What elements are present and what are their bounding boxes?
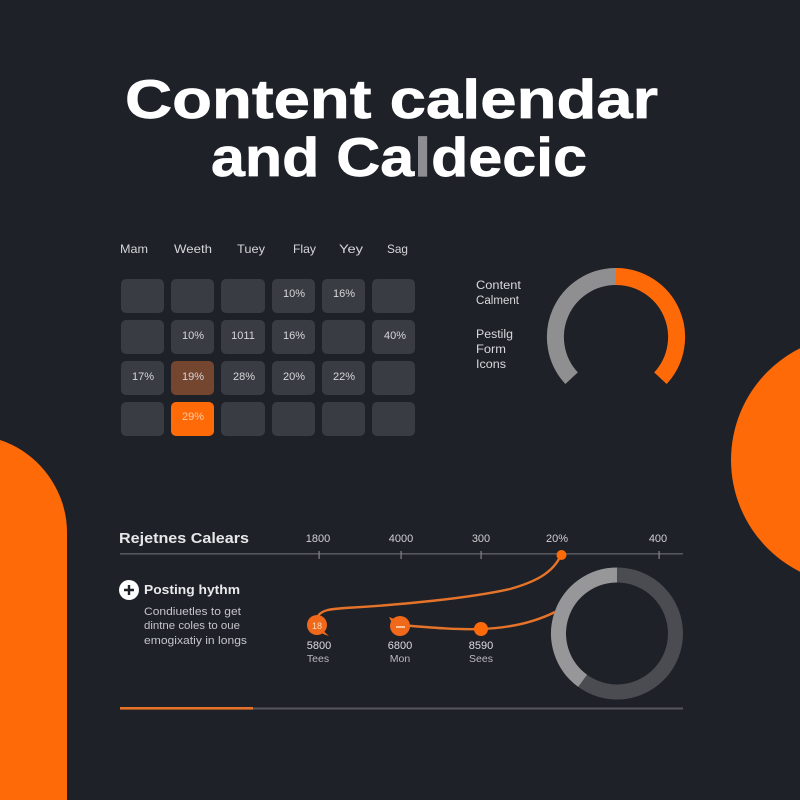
gauge side labels: Calment: [476, 295, 520, 307]
cell percentages: [132, 288, 406, 423]
title: [125, 68, 658, 188]
cell percentages: 22%: [333, 371, 355, 383]
milestone: mon: Mon: [390, 653, 410, 665]
cell percentages: 1011: [231, 330, 255, 342]
cell percentages: 20%: [283, 371, 305, 383]
connector lines: [318, 555, 561, 629]
gauge side labels: Content: [476, 280, 522, 292]
gauge side labels: Form: [476, 344, 506, 356]
cell percentages: 16%: [333, 288, 355, 300]
cell percentages: 40%: [384, 330, 406, 342]
milestone: tees: [307, 615, 331, 665]
milestone: mon: [388, 616, 412, 665]
decorative orange shape: left: [0, 440, 67, 800]
description: dintne coles to oue: [144, 620, 240, 632]
top marker: [556, 550, 566, 560]
weekday labels: Mam: [120, 242, 148, 256]
weekday labels: [120, 242, 408, 256]
timeline axis: [120, 533, 683, 559]
cell percentages: 16%: [283, 330, 305, 342]
milestone: sees: [469, 622, 493, 665]
cell percentages: 17%: [132, 371, 154, 383]
weekday labels: Weeth: [174, 242, 212, 256]
milestone: tees: 18: [312, 621, 322, 631]
donut chart: [558, 575, 676, 692]
axis labels: 300: [472, 533, 490, 545]
title: and Ca ldecic: [211, 126, 587, 188]
weekday labels: Flay: [293, 242, 316, 256]
description: emogixatiy in longs: [144, 635, 248, 647]
description: Condiuetles to get: [144, 606, 241, 618]
cell percentages: 29%: [182, 411, 204, 423]
milestone: sees: 8590: [469, 640, 493, 652]
milestone: sees: Sees: [469, 653, 493, 665]
icon: plus: [119, 580, 139, 600]
axis labels: 4000: [389, 533, 413, 545]
milestone: tees: 5800: [307, 640, 331, 652]
gauge side labels: Icons: [476, 359, 506, 371]
decorative orange circle: right: [731, 335, 800, 585]
calendar cells: [121, 279, 415, 436]
gauge chart: [555, 276, 677, 378]
description: [144, 606, 248, 647]
axis labels: 1800: [306, 533, 330, 545]
weekday labels: Tuey: [237, 242, 265, 256]
progress bar: [120, 707, 683, 710]
gauge side labels: Pestilg: [476, 329, 513, 341]
milestone: mon: 6800: [388, 640, 412, 652]
axis labels: 400: [649, 533, 667, 545]
axis labels: 20%: [546, 533, 568, 545]
cell percentages: 19%: [182, 371, 204, 383]
gauge side labels: [476, 280, 522, 371]
calendar heatmap: [120, 242, 415, 436]
cell percentages: 10%: [283, 288, 305, 300]
section heading: calendars: Rejetnes Calears: [119, 531, 249, 547]
weekday labels: Sag: [387, 242, 408, 256]
weekday labels: Yey: [339, 242, 363, 256]
posting rhythm heading: Posting hythm: [144, 582, 240, 597]
milestone: tees: Tees: [307, 653, 329, 665]
title: Content calendar: [125, 68, 658, 130]
cell percentages: 28%: [233, 371, 255, 383]
axis labels: [306, 533, 667, 545]
posting rhythm block: [119, 580, 248, 647]
cell percentages: 10%: [182, 330, 204, 342]
